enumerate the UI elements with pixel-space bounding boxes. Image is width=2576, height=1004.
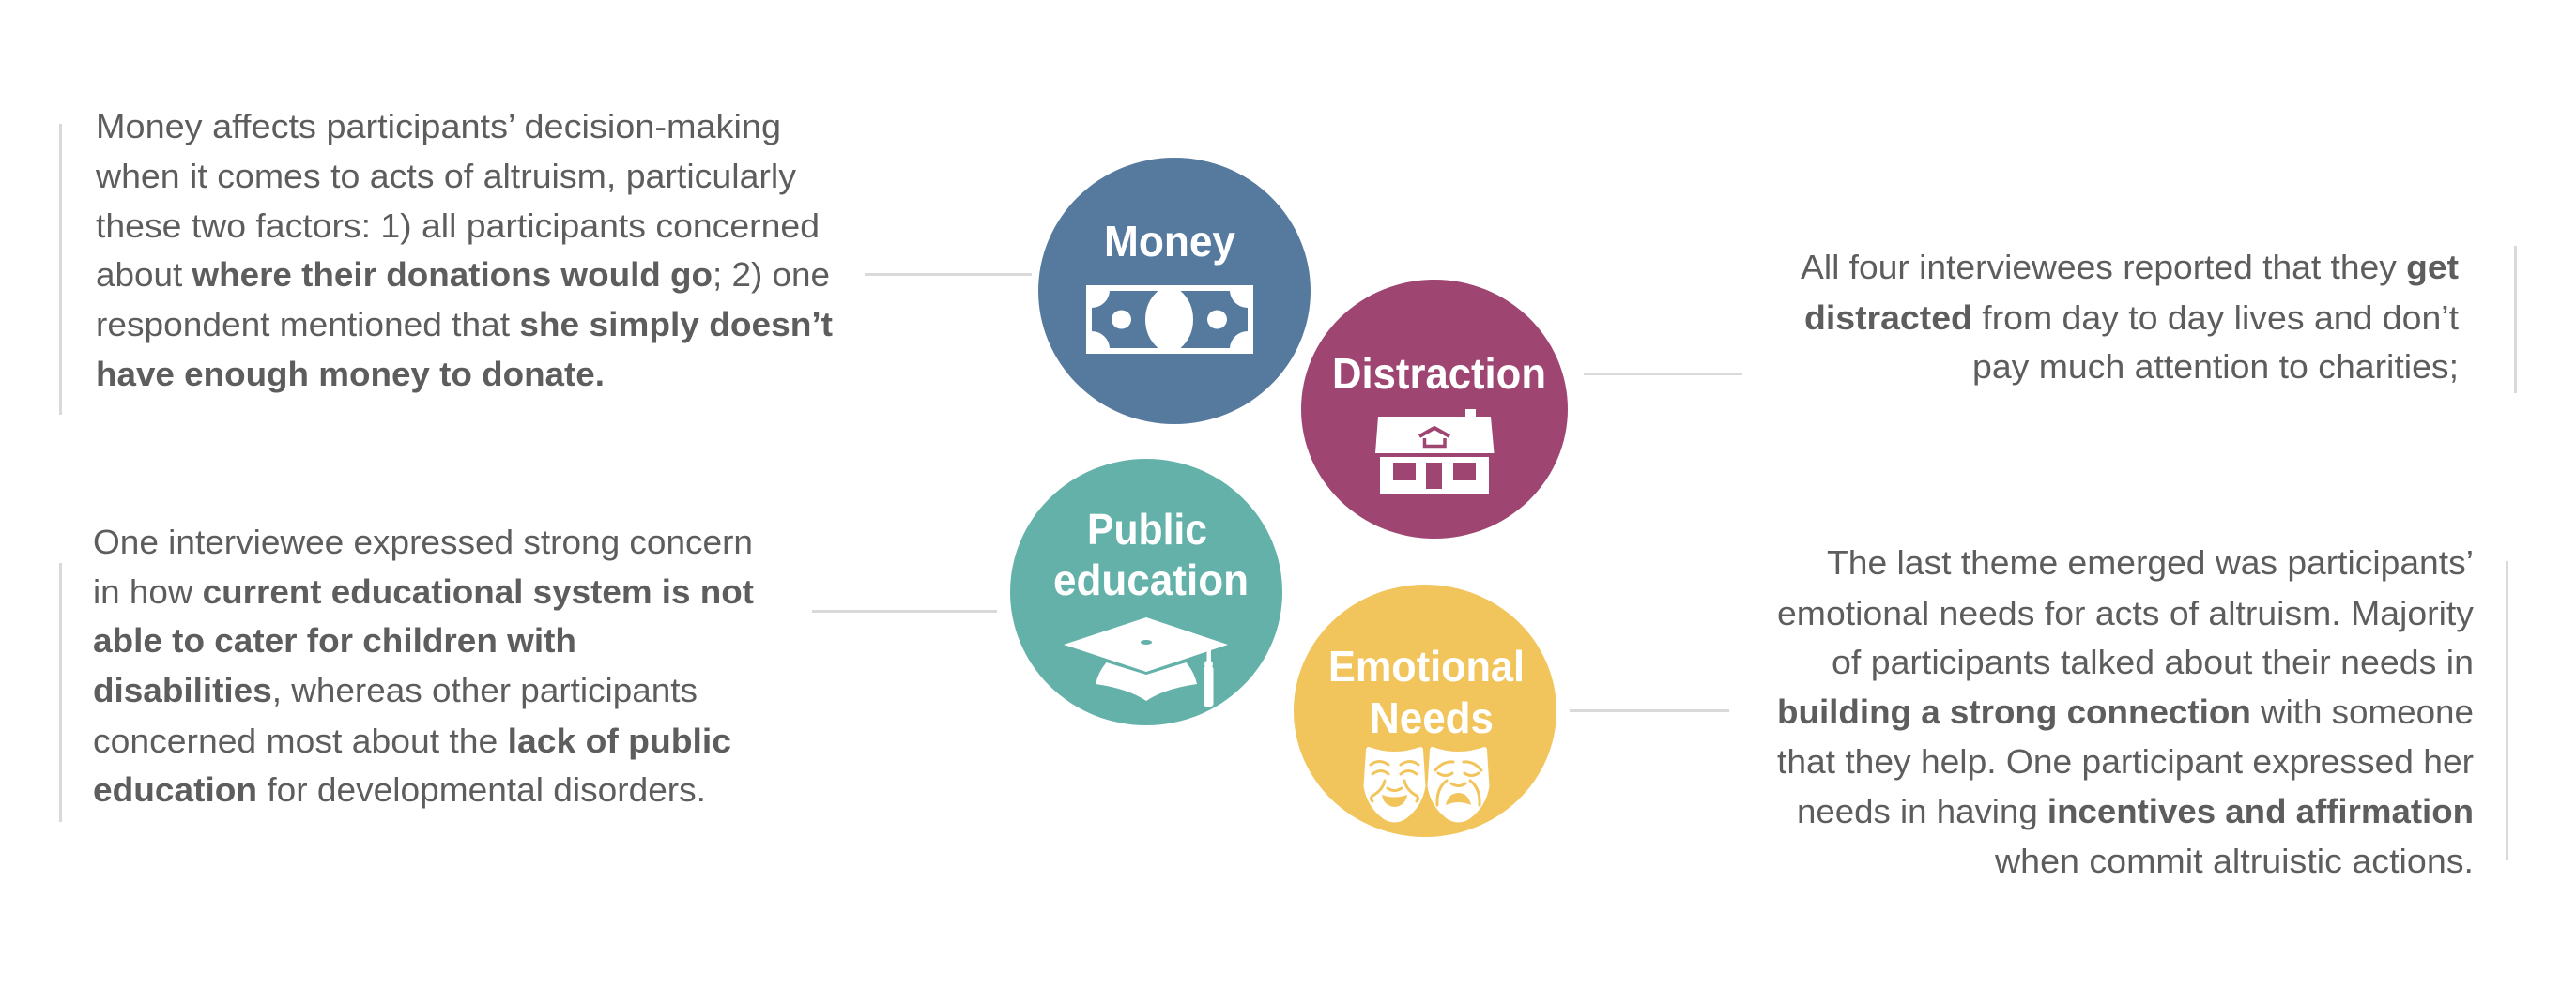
text block: money: about where their donations would go ; 2) one <box>96 255 830 294</box>
circle: emotional needs: Emotional <box>1328 642 1525 691</box>
text block: emotional needs: of participants talked about their needs in <box>1832 643 2474 681</box>
text block: public education <box>59 523 754 822</box>
connector: public education <box>812 610 997 613</box>
text block: emotional needs: emotional needs for acts of altruism. Majority <box>1777 594 2474 632</box>
circle: distraction: Distraction <box>1332 349 1546 398</box>
circle: public education <box>1010 459 1282 725</box>
text block: emotional needs: building a strong connection with someone <box>1777 692 2474 731</box>
circle: distraction <box>1301 280 1568 539</box>
text block: public education: One interviewee expressed strong concern <box>93 523 753 561</box>
text block: money: respondent mentioned that she simply doesn’t <box>96 305 833 343</box>
circle: emotional needs <box>1294 585 1556 837</box>
text block: money: Money affects participants’ decision-making <box>96 107 781 145</box>
connector: money <box>865 273 1032 276</box>
text block: public education: able to cater for children with <box>93 621 576 660</box>
connector: distraction <box>1584 373 1742 375</box>
text block: distraction: distracted from day to day lives and don’t <box>1804 298 2459 337</box>
icon: banknote <box>1086 285 1253 354</box>
text block: public education: in how current educational system is not <box>93 572 754 611</box>
text block: emotional needs <box>1777 543 2508 880</box>
text block: emotional needs: when commit altruistic actions. <box>1994 842 2474 880</box>
text block: distraction <box>1801 246 2517 393</box>
circle: money <box>1038 158 1311 424</box>
connector: emotional needs <box>1570 709 1729 712</box>
circle: money: Money <box>1104 217 1235 266</box>
text block: distraction: pay much attention to charities; <box>1972 347 2459 386</box>
text block: emotional needs: that they help. One participant expressed her <box>1777 742 2474 781</box>
text block: money: when it comes to acts of altruism, particularly <box>95 157 796 195</box>
text block: emotional needs: The last theme emerged was participants’ <box>1827 543 2474 582</box>
text block: public education: concerned most about the lack of public <box>93 722 731 760</box>
icon: theatre masks <box>1363 747 1489 822</box>
text block: public education: education for developmental disorders. <box>93 770 706 809</box>
circle: public education: education <box>1053 555 1249 604</box>
text block: distraction: All four interviewees reported that they get <box>1801 248 2459 286</box>
icon: graduation cap <box>1064 617 1228 707</box>
circle: emotional needs: Needs <box>1370 693 1494 742</box>
text block: money: have enough money to donate. <box>96 355 605 393</box>
circle: public education: Public <box>1087 505 1207 554</box>
text block: public education: disabilities, whereas other participants <box>93 671 698 709</box>
text block: money <box>59 107 833 415</box>
text block: emotional needs: needs in having incentives and affirmation <box>1797 792 2474 830</box>
icon: house <box>1375 409 1495 494</box>
text block: money: these two factors: 1) all participants concerned <box>96 206 820 245</box>
